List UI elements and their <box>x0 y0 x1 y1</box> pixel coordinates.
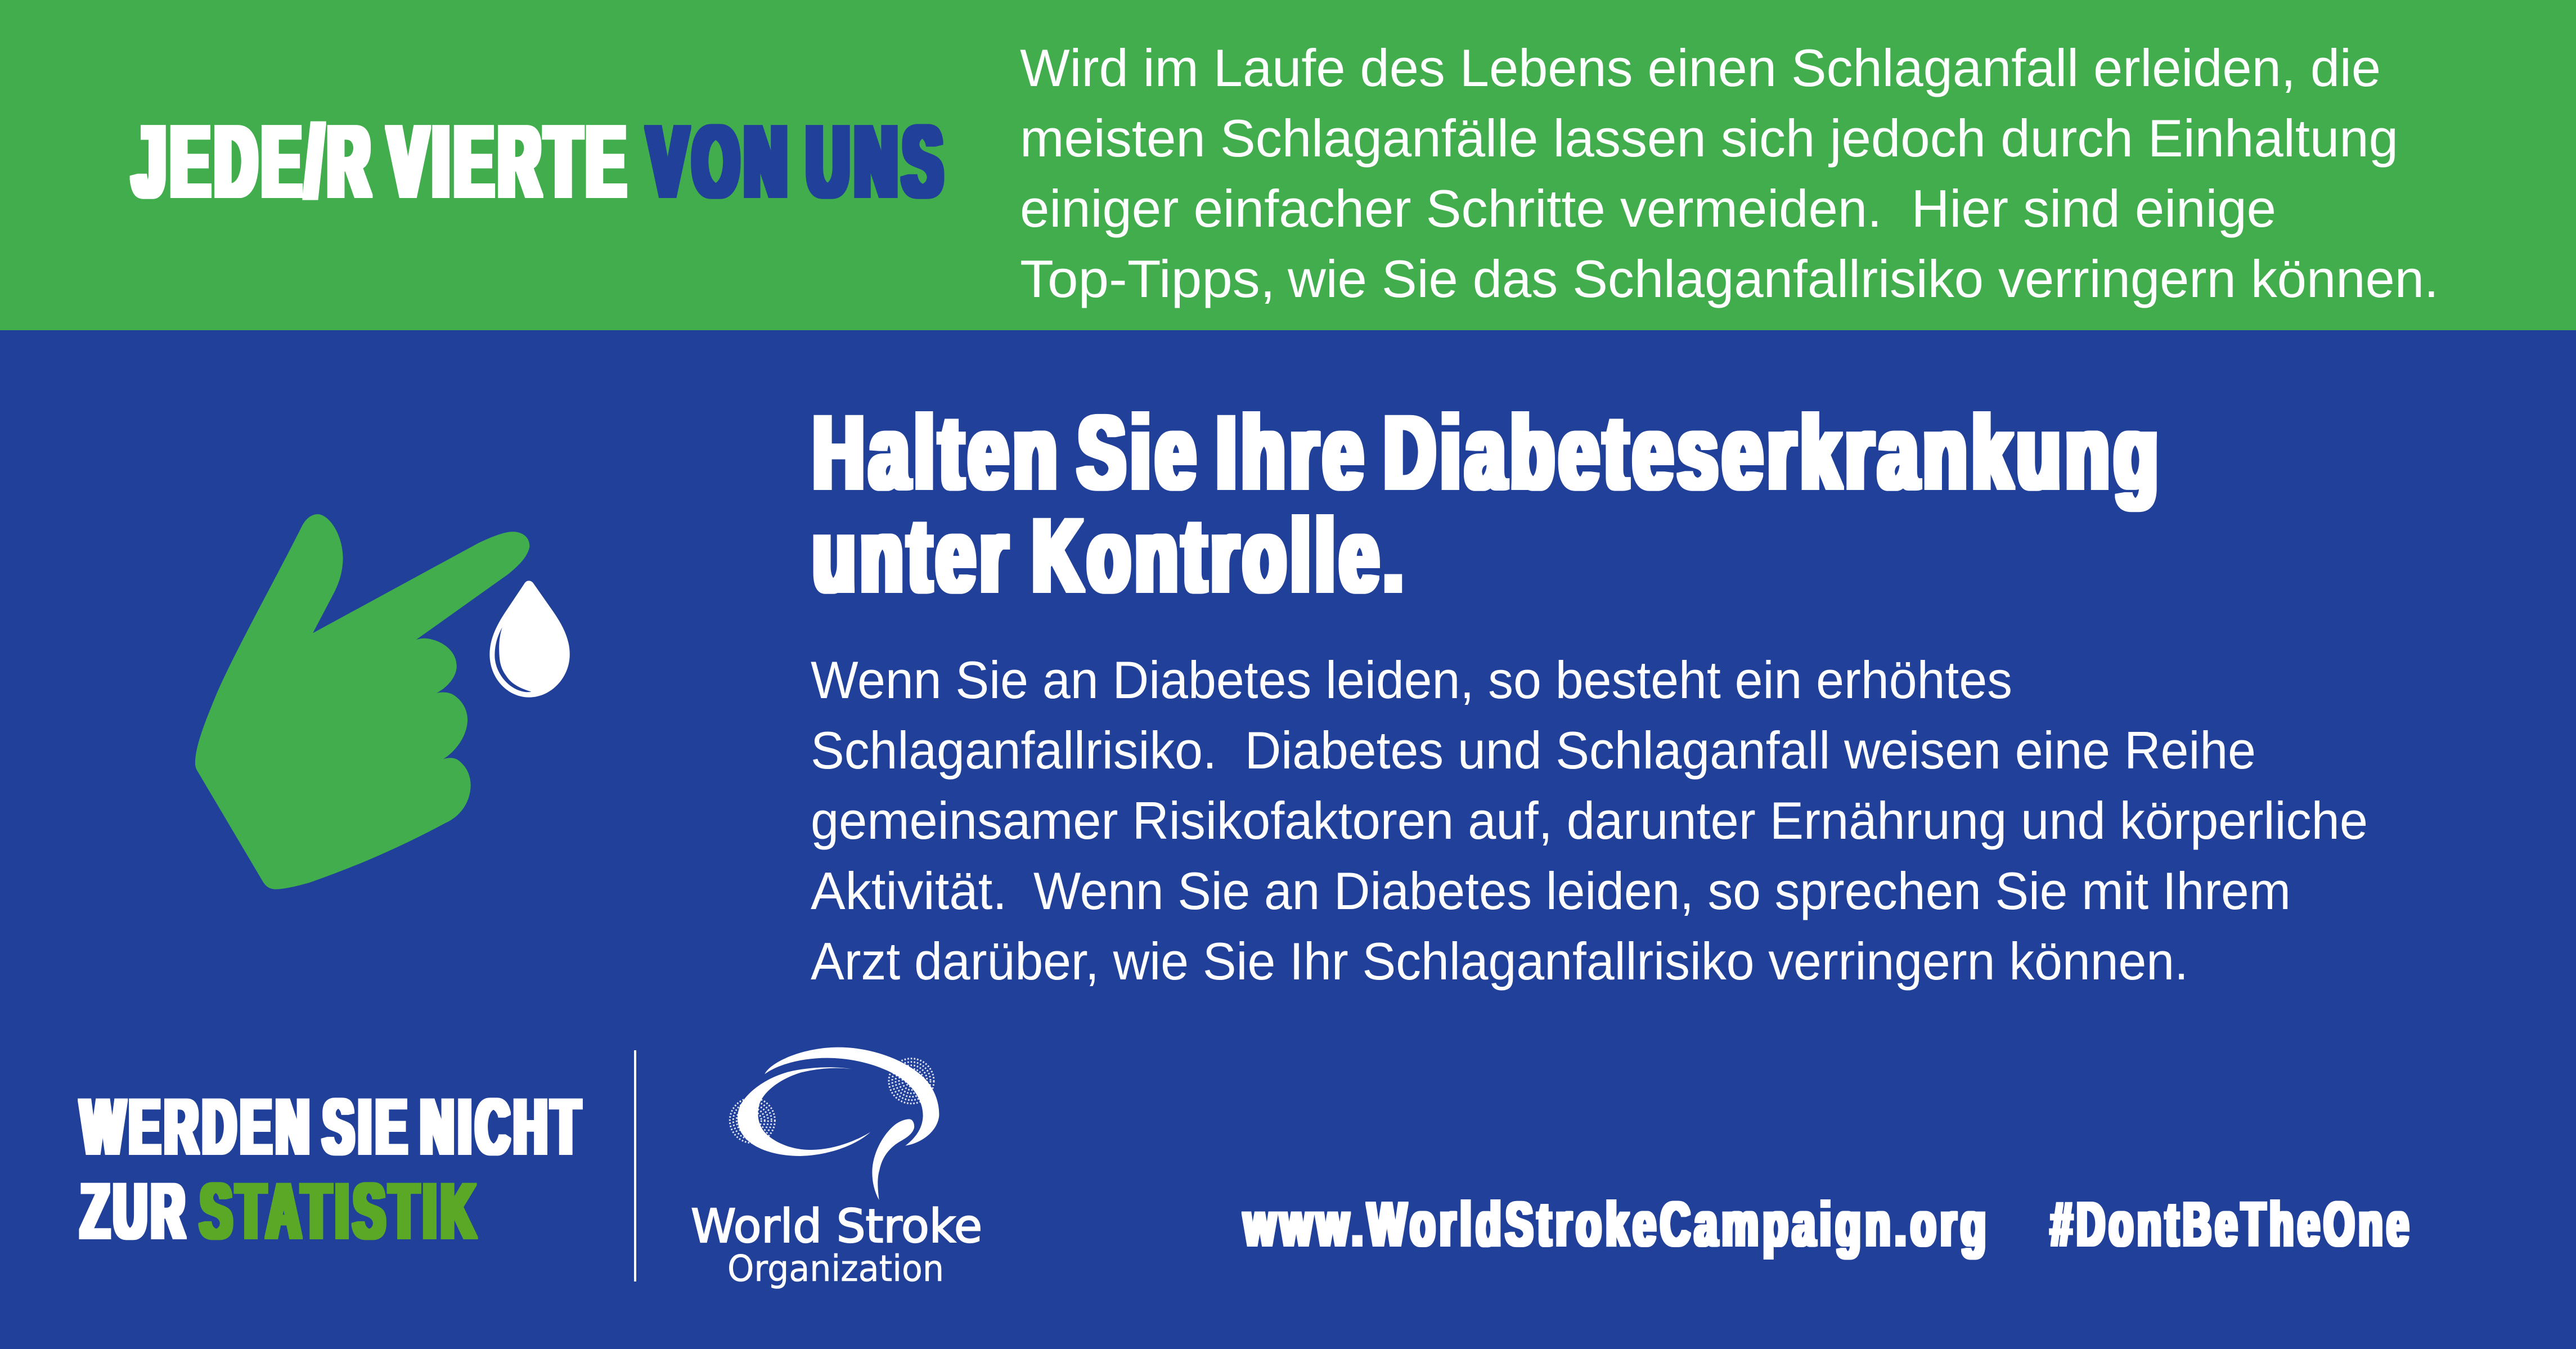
body paragraph: Wenn Sie an Diabetes leiden, so sprechen Sie mit Ihrem <box>1033 861 2291 920</box>
slogan: Werden Sie nicht zur Statistik: WERDEN SIE NICHT <box>81 1082 585 1171</box>
intro paragraph <box>1020 38 2439 308</box>
logo mark <box>730 1047 939 1200</box>
slogan: Werden Sie nicht zur Statistik: ZUR <box>81 1167 189 1255</box>
intro paragraph: Wird im Laufe des Lebens einen Schlaganfall erleiden, die <box>1020 38 2381 97</box>
body paragraph: gemeinsamer Risikofaktoren auf, darunter Ernährung und körperliche <box>811 791 2368 850</box>
icon: white blood drop <box>489 581 570 698</box>
logo: World Stroke Organization: Organization <box>727 1248 944 1290</box>
panel: top green band <box>0 0 2576 330</box>
body paragraph: Schlaganfallrisiko. Diabetes und Schlaganfall weisen eine Reihe <box>811 721 2256 780</box>
slogan: Werden Sie nicht zur Statistik: STATISTIK <box>200 1167 480 1255</box>
logo: World Stroke Organization <box>691 1047 982 1290</box>
body paragraph: Aktivität. <box>811 861 1007 920</box>
slogan: Werden Sie nicht zur Statistik <box>81 1082 585 1255</box>
intro paragraph: Top-Tipps, <box>1020 249 1275 308</box>
logo wordmark: World Stroke <box>691 1200 982 1253</box>
headline: Jede/r vierte von uns: JEDE/R VIERTE <box>133 105 631 218</box>
icon: green hand <box>195 514 529 889</box>
body paragraph: Wenn Sie an Diabetes leiden, so besteht ein erhöhtes <box>811 650 2012 709</box>
heading: Halten Sie Ihre Diabeteserkrankung unter Kontrolle: unter Kontrolle. <box>813 498 1408 614</box>
body paragraph: Arzt darüber, wie Sie Ihr Schlaganfallrisiko verringern können. <box>811 932 2188 991</box>
icon: hand pointing at blood drop <box>195 514 570 889</box>
heading: Halten Sie Ihre Diabeteserkrankung unter Kontrolle <box>813 395 2163 614</box>
divider line <box>634 1050 636 1281</box>
intro paragraph: wie Sie das Schlaganfallrisiko verringern können. <box>1287 249 2439 308</box>
headline: Jede/r vierte von uns: VON UNS <box>648 105 948 218</box>
intro paragraph: einiger einfacher Schritte vermeiden. Hier sind einige <box>1020 179 2276 238</box>
campaign website: www.WorldStrokeCampaign.org <box>1243 1190 1990 1259</box>
body paragraph <box>811 650 2368 991</box>
intro paragraph: meisten Schlaganfälle lassen sich jedoch durch Einhaltung <box>1020 109 2398 168</box>
